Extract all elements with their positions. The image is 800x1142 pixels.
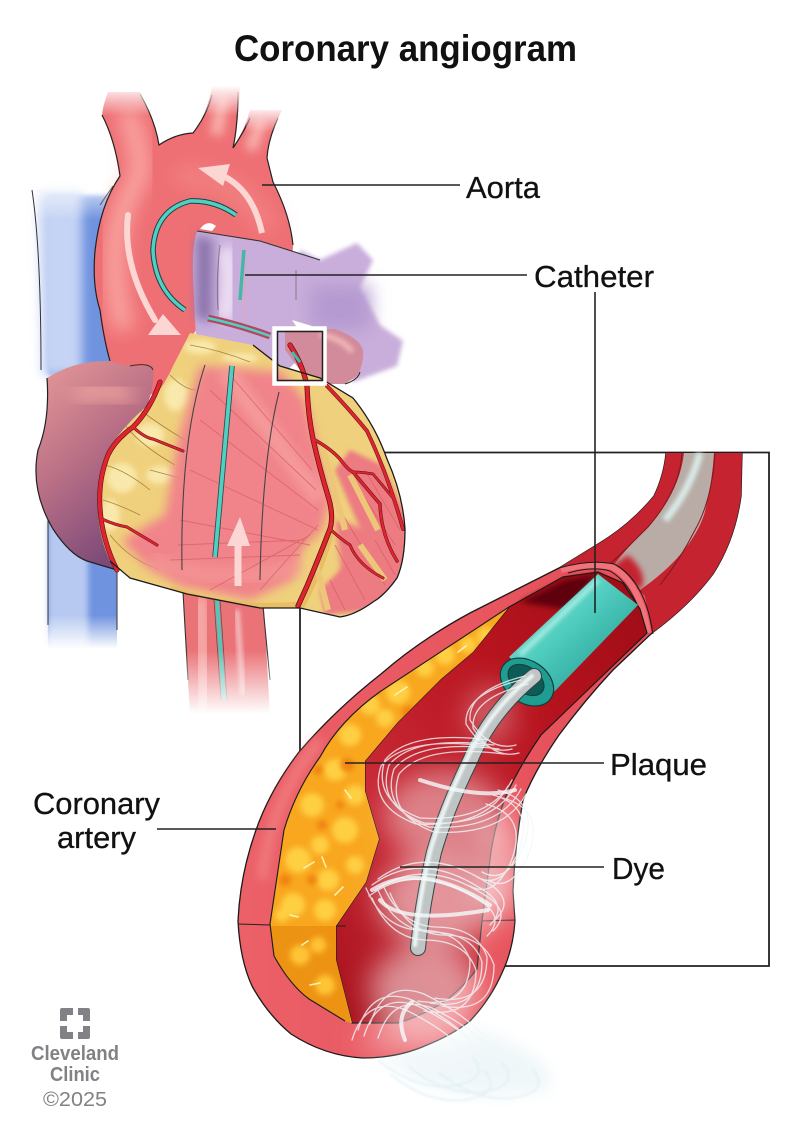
right atrium [36,361,153,570]
detail square [274,328,324,384]
cut line [238,920,515,926]
panel: artery cross section [238,453,742,1100]
label: Catheter: Catheter [534,259,654,294]
milky dye cloud [360,685,524,1058]
upward arrow [227,517,250,586]
fat creases [103,345,250,570]
label: Catheter [245,259,654,613]
label: Coronary artery: artery [57,820,136,855]
proximal tube [559,453,742,633]
ventricle [98,333,408,617]
title: Coronary angiogram [234,28,577,69]
logo: Cleveland Clinic [31,1008,119,1111]
label: Dye: Dye [612,851,665,886]
logo: Cleveland Clinic: Cleveland [31,1043,119,1065]
label: Coronary artery: Coronary [33,786,160,821]
dye swirls [352,676,533,1052]
catheter [491,574,638,716]
connector box [300,452,769,966]
outer vessel [238,453,742,1058]
icon: logo cross [60,1008,90,1039]
dye strands outside vessel [378,1056,539,1100]
muscle region [122,366,330,600]
left atrial appendage [285,320,363,384]
vessel ring [561,565,648,633]
panel: heart illustration [25,78,408,735]
dye outside vessel [380,1030,551,1095]
aorta arch [92,78,293,395]
plaque [260,607,509,1026]
catheter in arch [153,201,236,310]
inner catheter tube [415,676,534,948]
coronary arteries [100,345,403,606]
pulmonary artery [193,231,403,382]
vena cava upper [25,160,120,375]
arrow: aorta upper [214,172,262,233]
fat highlights [100,340,258,531]
arrow: aorta lower [127,215,155,320]
wall shading [262,740,320,880]
lumen [336,572,647,1023]
label: Aorta: Aorta [466,170,541,205]
logo: Cleveland Clinic: Clinic [50,1064,100,1086]
catheter through heart [215,366,232,557]
label: Coronary artery [33,786,276,855]
logo: Cleveland Clinic: ©2025 [43,1089,107,1111]
vena cava lower [36,520,131,660]
descending aorta [170,590,285,735]
label: Plaque: Plaque [610,747,707,782]
